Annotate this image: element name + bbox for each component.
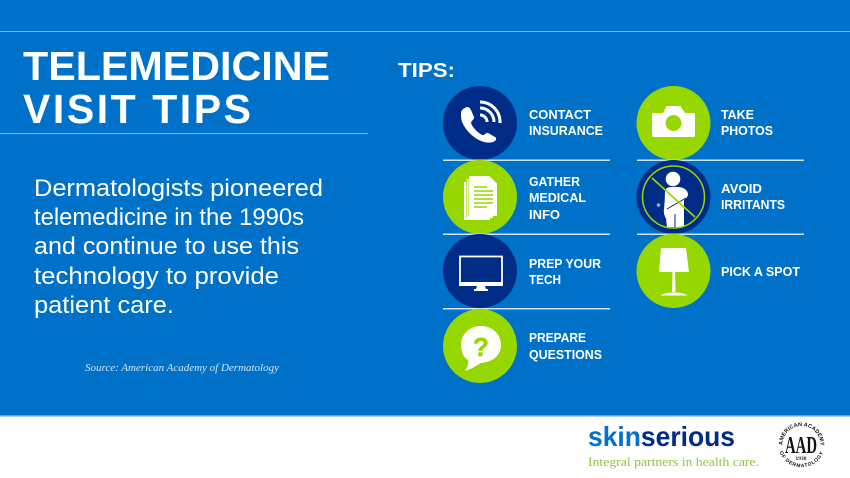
tip: contact insurance: CONTACT	[529, 107, 591, 122]
intro paragraph: telemedicine in the 1990s	[34, 204, 304, 231]
logo: skinserious: skinserious	[588, 421, 735, 452]
title	[23, 43, 330, 132]
icon: question bubble: ?	[473, 332, 489, 362]
tip: gather medical info	[443, 160, 586, 234]
tagline: Integral partners in health care.	[588, 454, 759, 469]
intro paragraph: and continue to use this	[34, 233, 299, 260]
logo: AAD seal: AAD	[785, 433, 817, 459]
logo: AAD seal	[778, 422, 824, 468]
icon: question bubble	[461, 326, 501, 371]
source note: Source: American Academy of Dermatology	[85, 362, 279, 374]
icon: person scratching, crossed out	[642, 166, 704, 228]
tip: prep your tech: TECH	[529, 272, 561, 287]
tip: gather medical info: MEDICAL	[529, 190, 586, 205]
tip: gather medical info: GATHER	[529, 174, 581, 189]
tip: prepare questions	[443, 309, 602, 383]
tip: prepare questions: QUESTIONS	[529, 347, 602, 362]
tips heading: TIPS:	[398, 60, 455, 82]
tip: prep your tech: PREP YOUR	[529, 256, 602, 271]
logo: skinserious	[588, 421, 759, 469]
icon: documents	[464, 176, 497, 220]
tip: prepare questions: PREPARE	[529, 330, 586, 345]
tip: take photos: PHOTOS	[721, 123, 773, 138]
tip: take photos	[636, 86, 773, 160]
tip: pick a spot: PICK A SPOT	[721, 264, 800, 279]
tip: pick a spot	[636, 234, 800, 308]
logo: AAD seal: OF DERMATOLOGY	[780, 451, 823, 468]
tip: avoid irritants	[636, 160, 785, 234]
intro paragraph: Dermatologists pioneered	[34, 175, 323, 202]
icon: lamp	[659, 248, 689, 296]
icon: phone	[461, 102, 500, 143]
tip: avoid irritants: IRRITANTS	[721, 197, 785, 212]
intro paragraph	[34, 175, 323, 319]
tip: prep your tech	[443, 234, 602, 308]
logo: AAD seal: AMERICAN ACADEMY	[778, 422, 824, 446]
tip: contact insurance: INSURANCE	[529, 123, 603, 138]
intro paragraph: patient care.	[34, 292, 174, 319]
intro paragraph: technology to provide	[34, 263, 279, 290]
tip: contact insurance	[443, 86, 603, 160]
logo: AAD seal: 1938	[796, 456, 807, 462]
title: VISIT TIPS	[23, 86, 251, 132]
tip: take photos: TAKE	[721, 107, 754, 122]
icon: monitor	[459, 256, 503, 291]
icon: camera	[652, 106, 695, 137]
title: TELEMEDICINE	[23, 43, 330, 89]
tip: avoid irritants: AVOID	[721, 181, 762, 196]
tip: gather medical info: INFO	[529, 207, 560, 222]
